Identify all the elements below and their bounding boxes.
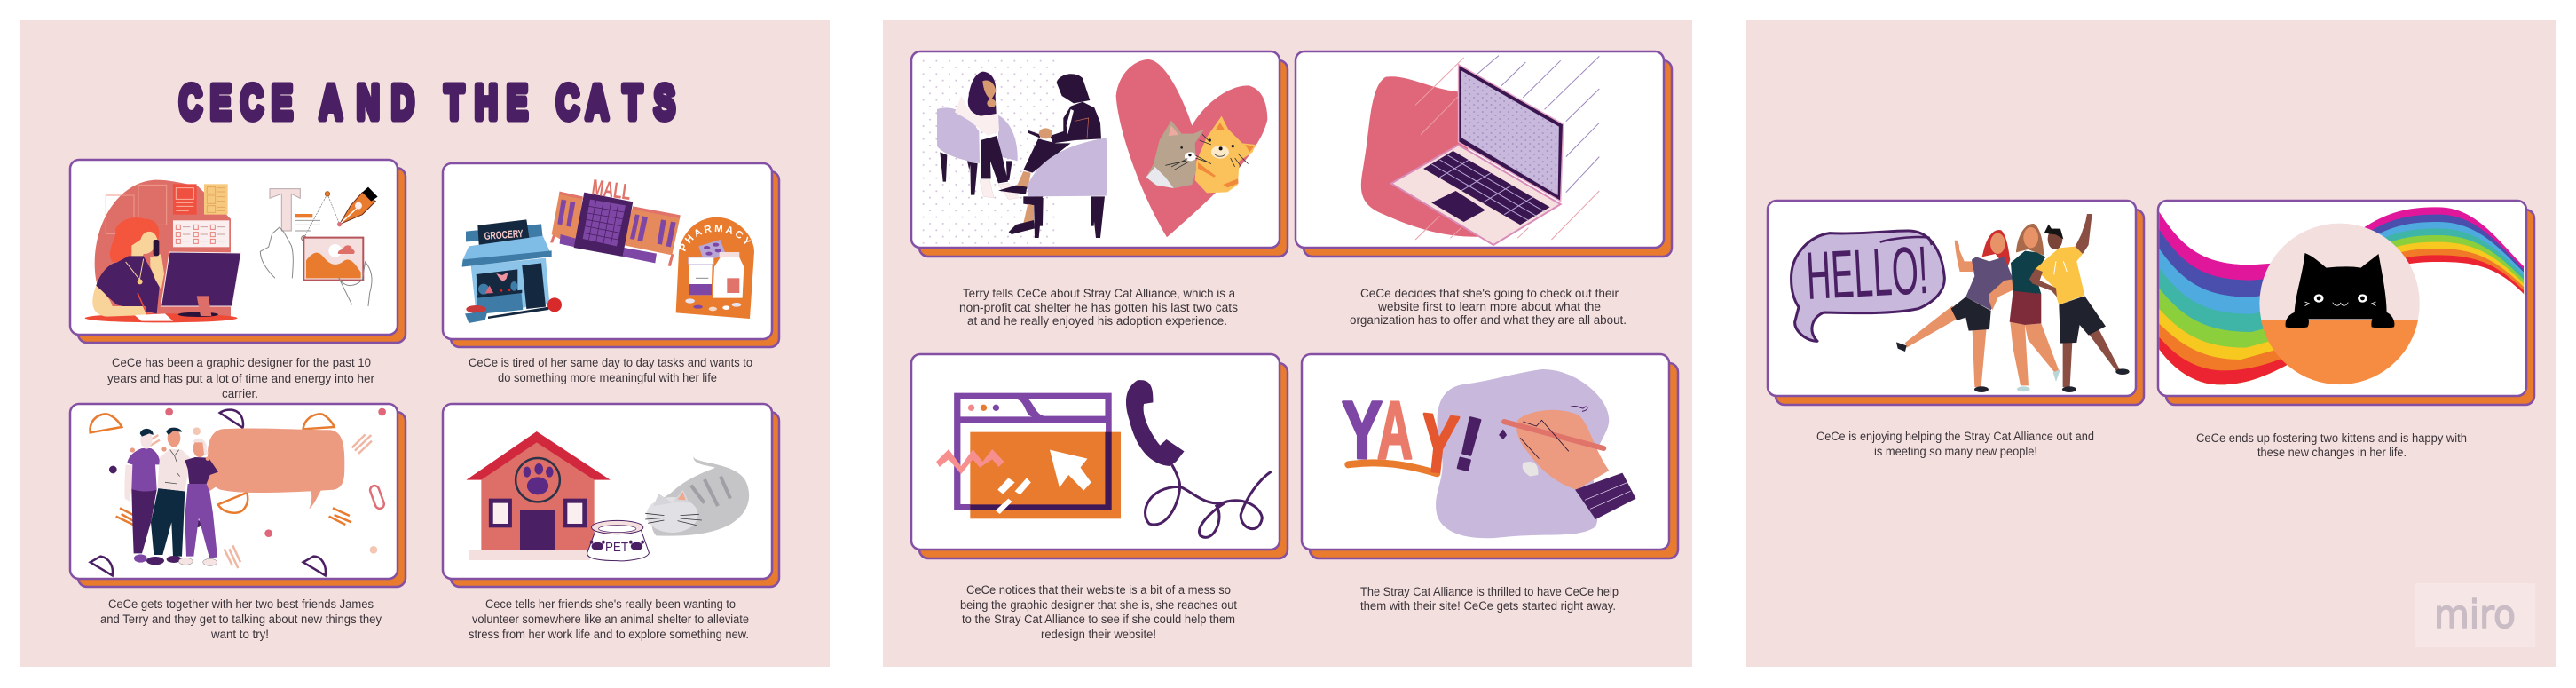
- panel: page 1: [20, 20, 830, 667]
- caption: card 4: stress from her work life and to explore something new.: [469, 628, 749, 641]
- lettering: YAY!: !: [1448, 400, 1491, 487]
- illustration: conversation and heart with cats: [918, 59, 1267, 244]
- illustration: laptop on blob: [1361, 56, 1599, 245]
- label: MALL sign: MALL: [590, 175, 633, 205]
- caption: card 2: [469, 356, 752, 384]
- caption: card A: [959, 287, 1238, 328]
- caption: card 4: Cece tells her friends she's really been wanting to: [485, 597, 736, 611]
- illustration: rainbow and black cat: [2158, 207, 2524, 384]
- illustration: lavender blob and drawing hand: [1348, 369, 1636, 538]
- caption: card 3: want to try!: [210, 628, 269, 641]
- lettering: HELLO!: HELLO!: [1804, 233, 1930, 314]
- caption: card B: website first to learn more about what the: [1377, 300, 1601, 313]
- caption: card 2: do something more meaningful with her life: [498, 371, 717, 384]
- caption: card C: to the Stray Cat Alliance to see if she could help them: [962, 613, 1235, 626]
- caption: card F: these new changes in her life.: [2257, 446, 2407, 459]
- caption: card B: organization has to offer and what they are all about.: [1350, 313, 1627, 327]
- caption: card 4: [469, 597, 749, 641]
- card: stores: [442, 162, 781, 348]
- illustration: shelter house, pet bowl and cat: [466, 431, 749, 561]
- caption: card 1: carrier.: [222, 387, 258, 400]
- caption: card B: [1350, 287, 1627, 327]
- watermark: miro: miro: [2434, 592, 2516, 637]
- caption: card E: is meeting so many new people!: [1874, 445, 2037, 458]
- card: animal shelter: [443, 404, 779, 587]
- lettering: YAY!: Y: [1415, 397, 1461, 491]
- lettering: YAY!: [1342, 385, 1491, 491]
- card: rainbow cat: [2158, 201, 2534, 405]
- caption: card 1: CeCe has been a graphic designer for the past 10: [112, 356, 371, 369]
- lettering: YAY!: A: [1377, 385, 1413, 476]
- label: GROCERY sign: GROCERY: [484, 227, 524, 242]
- caption: card C: CeCe notices that their website is a bit of a mess so: [966, 583, 1231, 597]
- illustration: grocery, mall and pharmacy: [462, 192, 754, 323]
- title: CECE AND THE CATS: [179, 75, 675, 129]
- caption: card A: at and he really enjoyed his adoption experience.: [967, 314, 1227, 328]
- panel: page 3: [1746, 20, 2556, 667]
- caption: card E: CeCe is enjoying helping the Stray Cat Alliance out and: [1816, 430, 2094, 443]
- illustration: hello bubble and three volunteers: [1792, 214, 2130, 392]
- caption: card 3: CeCe gets together with her two best friends James: [108, 597, 374, 611]
- caption: card F: [2196, 431, 2467, 459]
- caption: card F: CeCe ends up fostering two kittens and is happy with: [2196, 431, 2467, 445]
- illustration: browser window and telephone: [936, 380, 1272, 537]
- caption: card A: non-profit cat shelter he has gotten his last two cats: [959, 301, 1238, 314]
- caption: card D: them with their site! CeCe gets started right away.: [1360, 599, 1616, 613]
- caption: card 3: and Terry and they get to talking about new things they: [100, 613, 382, 626]
- card: Terry and the cats: [911, 51, 1288, 257]
- watermark: miro: [2415, 583, 2535, 647]
- card: YAY: [1302, 354, 1678, 558]
- caption: card C: [960, 583, 1237, 641]
- illustration: designer at desk: [85, 180, 378, 322]
- caption: card C: being the graphic designer that she is, she reaches out: [960, 598, 1237, 612]
- card: website and phone: [911, 354, 1288, 558]
- caption: card A: Terry tells CeCe about Stray Cat Alliance, which is a: [963, 287, 1235, 300]
- caption: card 4: volunteer somewhere like an animal shelter to alleviate: [472, 613, 749, 626]
- caption: card 1: years and has put a lot of time and energy into her: [107, 372, 375, 385]
- card: laptop: [1296, 51, 1672, 257]
- card: graphic designer: [70, 160, 406, 343]
- card: friends: [70, 404, 406, 587]
- caption: card D: [1360, 585, 1619, 613]
- caption: card 1: [107, 356, 375, 400]
- caption: card 2: CeCe is tired of her same day to day tasks and wants to: [469, 356, 752, 369]
- caption: card D: The Stray Cat Alliance is thrilled to have CeCe help: [1360, 585, 1619, 598]
- caption: card B: CeCe decides that she's going to check out their: [1360, 287, 1619, 300]
- illustration: three friends and speech bubble: [91, 408, 386, 575]
- caption: card 3: [100, 597, 382, 641]
- caption: card C: redesign their website!: [1041, 628, 1156, 641]
- panel: page 2: [883, 20, 1692, 667]
- lettering: YAY!: Y: [1342, 385, 1383, 476]
- label: PHARMACY sign: PHARMACY: [680, 225, 752, 252]
- card: hello: [1768, 201, 2144, 405]
- caption: card E: [1816, 430, 2094, 458]
- label: PET on bowl: PET: [605, 540, 628, 555]
